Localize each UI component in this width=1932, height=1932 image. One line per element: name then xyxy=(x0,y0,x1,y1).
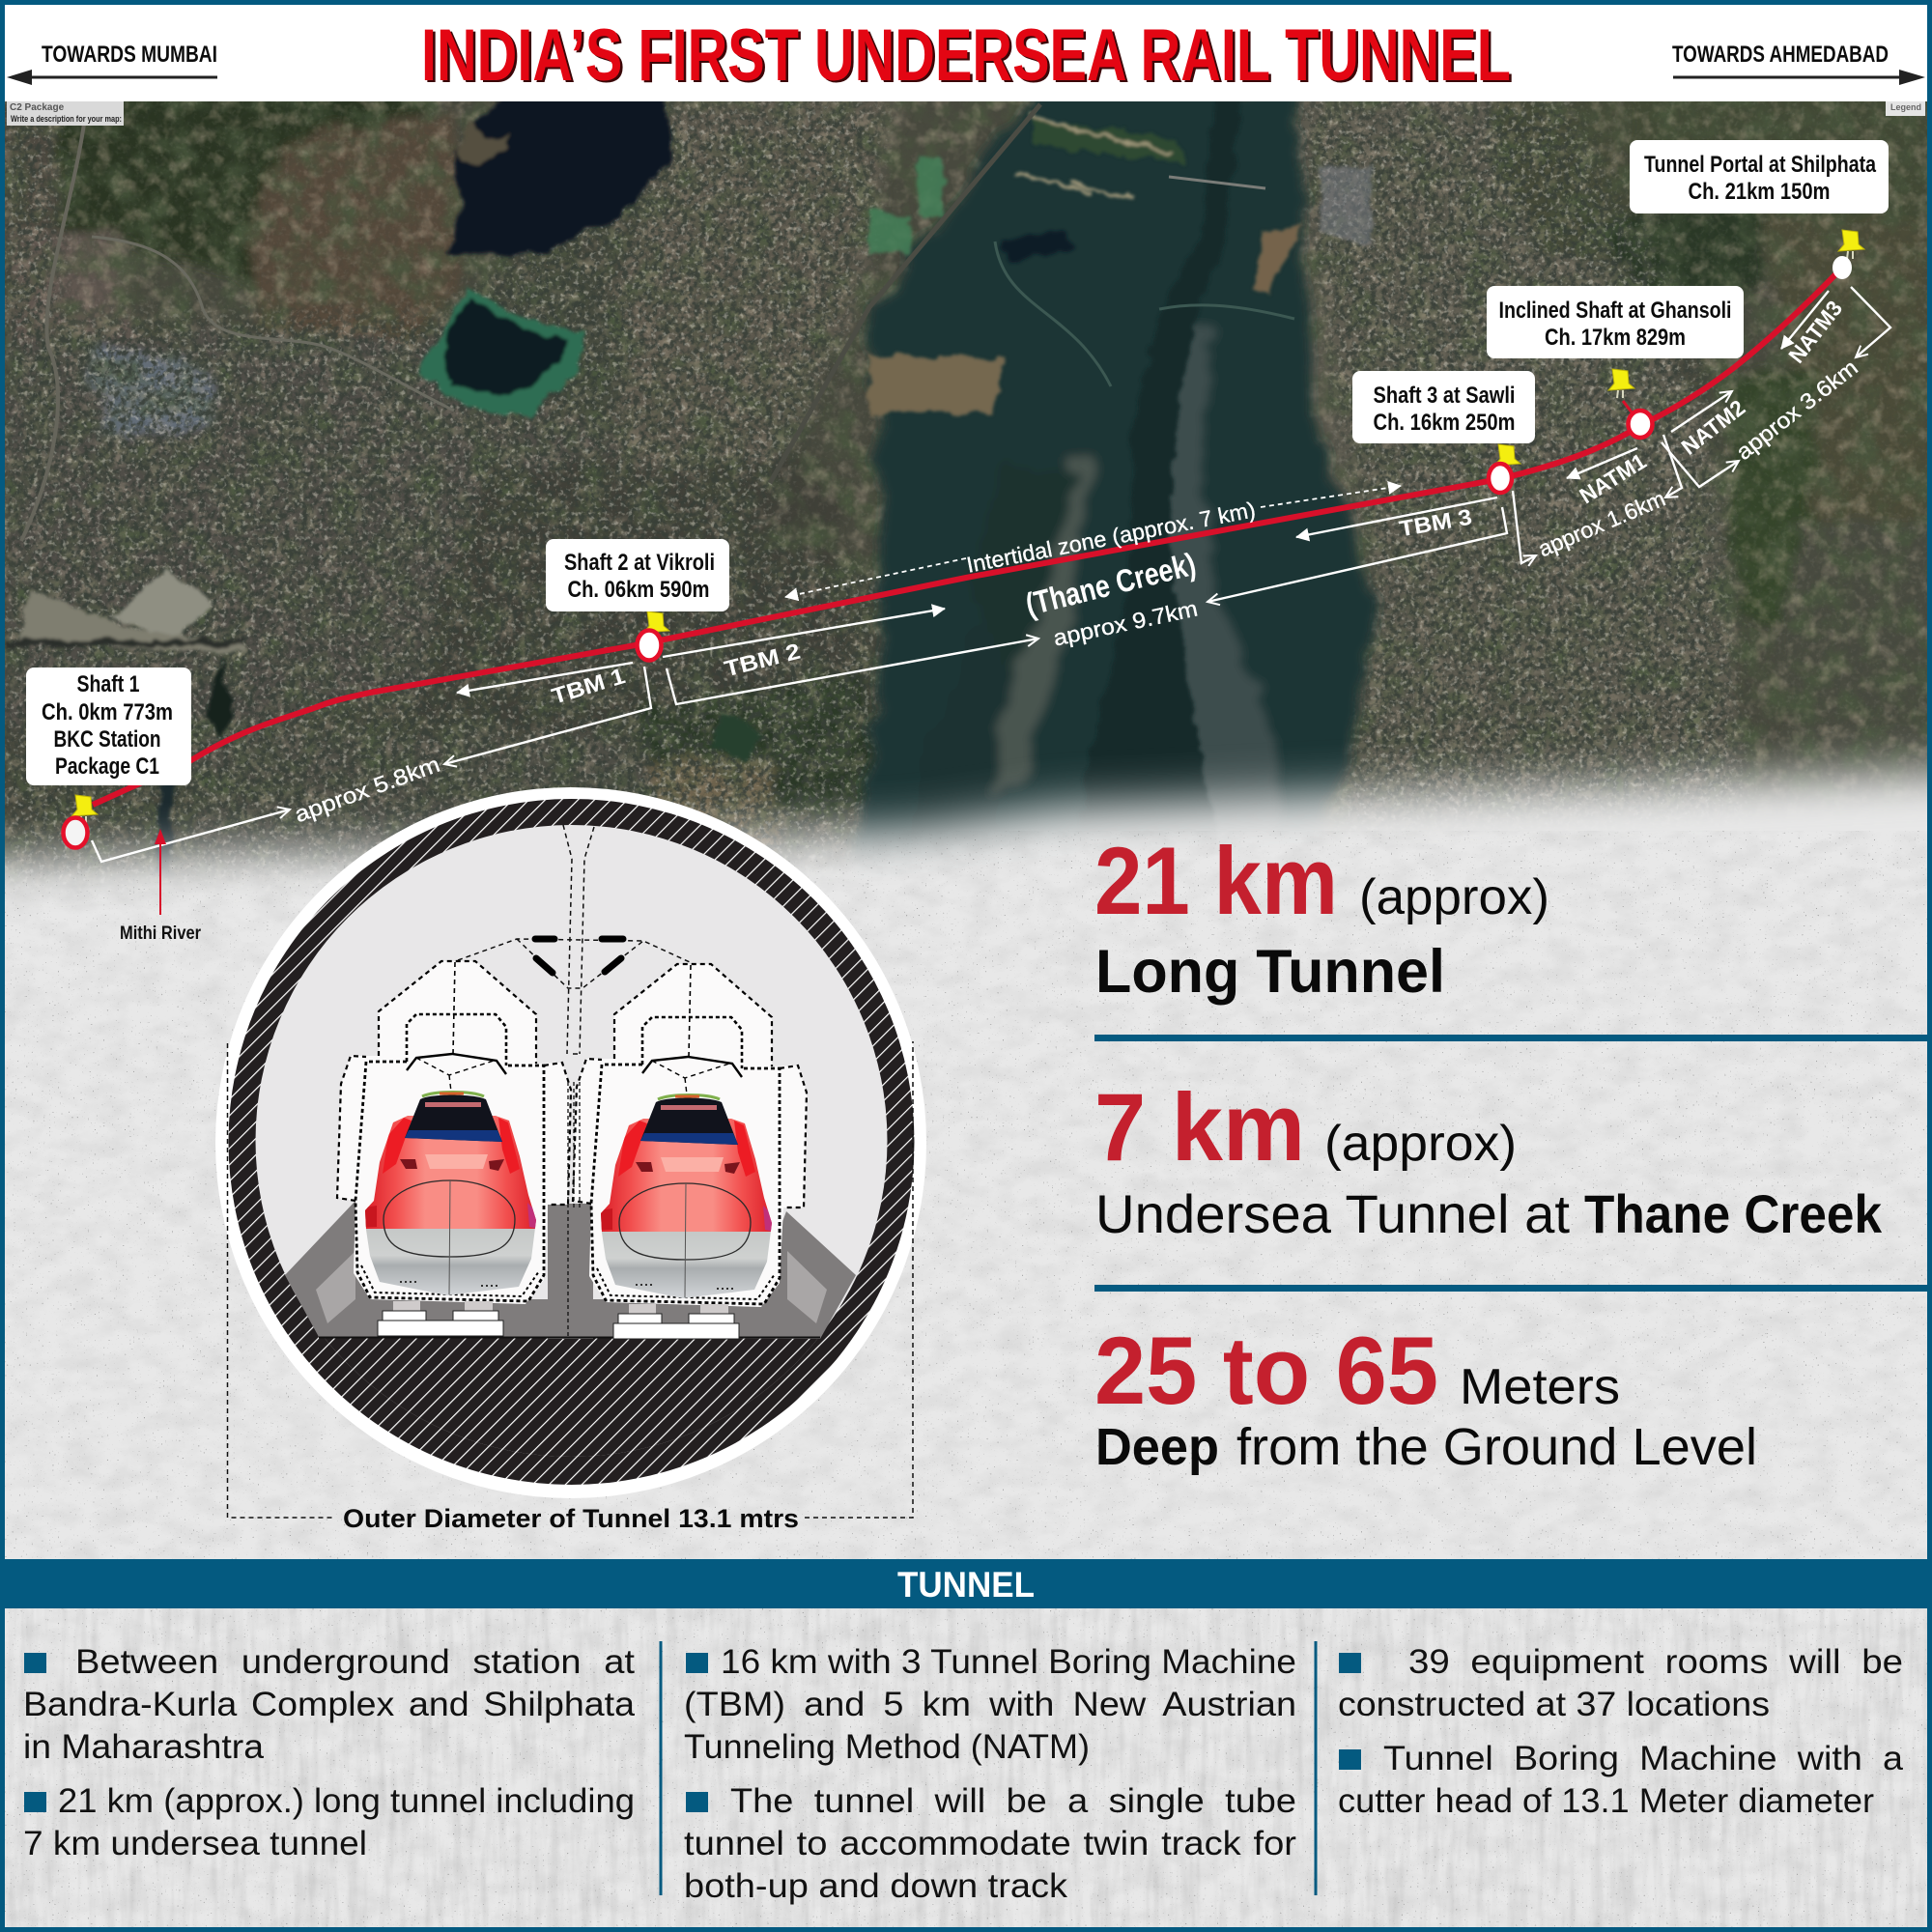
stat: 7 km undersea tunnel: Thane Creek xyxy=(1584,1183,1883,1244)
column 1 facts: 21 km (approx.) long tunnel including xyxy=(58,1782,635,1820)
map tag: C2 Package: Write a description for your map: xyxy=(11,114,122,124)
route annotations: NATM sections: approx 3.6km xyxy=(1731,355,1862,465)
column 1 facts xyxy=(23,1643,636,1862)
route annotations: NATM sections: NATM3 xyxy=(1783,296,1847,368)
arrow: towards Mumbai: TOWARDS MUMBAI xyxy=(42,42,217,68)
column 2 facts xyxy=(684,1643,1296,1905)
route annotations: TBM 1 section: TBM 1 xyxy=(549,663,628,709)
stat: 21 km long tunnel: Long Tunnel xyxy=(1095,938,1445,1006)
callout: Shaft 3: Ch. 16km 250m xyxy=(1374,410,1515,436)
callout: Shaft 1: Ch. 0km 773m xyxy=(42,699,173,725)
stat: 25 to 65 meters deep: Deep xyxy=(1095,1418,1219,1476)
route annotations: TBM 3 section xyxy=(1208,497,1507,602)
red tunnel route line xyxy=(93,268,1842,805)
right train with clearance envelope xyxy=(573,964,807,1339)
column 3 facts: cutter head of 13.1 Meter diameter xyxy=(1338,1782,1874,1820)
column 1 facts: Between underground station at xyxy=(75,1643,635,1681)
route annotations: TBM 2 section: approx 9.7km xyxy=(1051,595,1200,651)
stat: 25 to 65 meters deep: Meters xyxy=(1460,1359,1620,1415)
route annotations: TBM 3 section: TBM 3 xyxy=(1397,504,1474,541)
callout: Shaft 2: Shaft 2 at Vikroli xyxy=(564,550,715,576)
route annotations: NATM sections: NATM1 xyxy=(1575,448,1651,508)
stat: 7 km undersea tunnel: (approx) xyxy=(1324,1116,1517,1172)
marker: Shaft 2 xyxy=(638,611,669,661)
stat: 7 km undersea tunnel: Undersea Tunnel at xyxy=(1095,1183,1570,1244)
route annotations: NATM sections: approx 1.6km xyxy=(1534,486,1669,561)
callout: Shaft 1 xyxy=(26,668,191,785)
stat: 25 to 65 meters deep: from the Ground Level xyxy=(1236,1418,1757,1476)
callout: Shaft 1: Shaft 1 xyxy=(77,671,139,697)
map tag: Legend xyxy=(1886,101,1925,116)
callout: Inclined Shaft: Ch. 17km 829m xyxy=(1545,325,1686,351)
callout: Inclined Shaft xyxy=(1487,286,1744,358)
column 2 facts: both-up and down track xyxy=(684,1867,1068,1905)
column 2 facts: Tunneling Method (NATM) xyxy=(684,1728,1090,1766)
callout: Shaft 3: Shaft 3 at Sawli xyxy=(1374,383,1515,409)
map tag: Legend: Legend xyxy=(1890,102,1921,112)
route annotations: TBM 1 section xyxy=(92,663,651,862)
title: INDIA’S FIRST UNDERSEA RAIL TUNNEL xyxy=(423,16,1513,99)
callout: Shaft 1: Package C1 xyxy=(55,753,159,780)
map tag: C2 Package xyxy=(7,101,124,126)
tunnel track bed xyxy=(285,1201,856,1339)
column 3 facts xyxy=(1338,1643,1904,1820)
route annotations: TBM 1 section: approx 5.8km xyxy=(291,752,443,827)
header white strip xyxy=(0,0,1932,101)
arrow: towards Ahmedabad xyxy=(1672,42,1925,85)
satellite map of the tunnel corridor xyxy=(5,101,1927,895)
dimension line and label: outer diameter xyxy=(228,1041,913,1533)
dimension line and label: outer diameter: Outer Diameter of Tunnel 13.1 mtrs xyxy=(343,1504,799,1533)
column 3 facts: Tunnel Boring Machine with a xyxy=(1383,1740,1904,1777)
column 2 facts: The tunnel will be a single tube xyxy=(730,1782,1296,1820)
callout: Shaft 2 xyxy=(546,539,729,611)
route annotations: TBM 2 section: TBM 2 xyxy=(722,639,803,681)
column 3 facts: constructed at 37 locations xyxy=(1338,1686,1770,1723)
stat: 25 to 65 meters deep: 25 to 65 xyxy=(1094,1317,1438,1424)
marker: Tunnel Portal xyxy=(1833,230,1864,279)
overhead lights xyxy=(458,939,690,988)
column 1 facts: Bandra-Kurla Complex and Shilphata xyxy=(23,1686,636,1723)
route annotation: intertidal zone xyxy=(785,486,1401,597)
column 1 facts: 7 km undersea tunnel xyxy=(23,1825,367,1862)
stat: 21 km long tunnel xyxy=(1094,827,1549,1006)
section band: TUNNEL: TUNNEL xyxy=(897,1565,1035,1605)
stat: 25 to 65 meters deep xyxy=(1094,1317,1757,1476)
map tag: C2 Package: C2 Package xyxy=(10,102,65,113)
stat: 7 km undersea tunnel xyxy=(1094,1073,1883,1244)
title: INDIA’S FIRST UNDERSEA RAIL TUNNEL xyxy=(421,14,1511,97)
marker: Shaft 1 xyxy=(64,795,98,848)
tunnel cross-section diagram xyxy=(215,787,927,1531)
callout: Shaft 1: BKC Station xyxy=(54,726,160,753)
callout: Mithi River xyxy=(120,829,202,944)
column 2 facts: (TBM) and 5 km with New Austrian xyxy=(684,1686,1296,1723)
route annotations: TBM 2 section xyxy=(663,595,1200,704)
stat: 21 km long tunnel: 21 km xyxy=(1094,827,1338,934)
fade from map to concrete xyxy=(0,769,1932,1932)
column 1 facts: in Maharashtra xyxy=(23,1728,265,1766)
callout: Shaft 2: Ch. 06km 590m xyxy=(568,577,709,603)
marker: Shaft 3 xyxy=(1489,444,1520,493)
callout: Shaft 3 xyxy=(1352,371,1535,443)
route annotation: intertidal zone: Intertidal zone (approx. 7 km) xyxy=(964,497,1258,578)
marker: Inclined Shaft Ghansoli xyxy=(1608,369,1652,438)
callout: Tunnel Portal: Tunnel Portal at Shilphata xyxy=(1644,152,1877,178)
label: Thane Creek: (Thane Creek) xyxy=(1022,546,1199,622)
left train with clearance envelope xyxy=(337,961,571,1336)
callout: Tunnel Portal xyxy=(1630,140,1889,213)
callout: Inclined Shaft: Inclined Shaft at Ghansoli xyxy=(1499,298,1731,324)
section band: TUNNEL xyxy=(0,1559,1932,1608)
callout: Tunnel Portal: Ch. 21km 150m xyxy=(1689,179,1830,205)
column 2 facts: tunnel to accommodate twin track for xyxy=(684,1825,1296,1862)
column 2 facts: 16 km with 3 Tunnel Boring Machine xyxy=(721,1643,1296,1681)
stat: 7 km undersea tunnel: 7 km xyxy=(1094,1073,1305,1180)
route annotations: NATM sections xyxy=(1513,287,1890,563)
callout: Mithi River: Mithi River xyxy=(120,923,202,944)
stat: 21 km long tunnel: (approx) xyxy=(1359,869,1549,925)
overhead service shaft xyxy=(563,825,594,1054)
column 3 facts: 39 equipment rooms will be xyxy=(1408,1643,1903,1681)
route annotations: NATM sections: NATM2 xyxy=(1676,395,1749,460)
arrow: towards Mumbai xyxy=(7,42,217,85)
